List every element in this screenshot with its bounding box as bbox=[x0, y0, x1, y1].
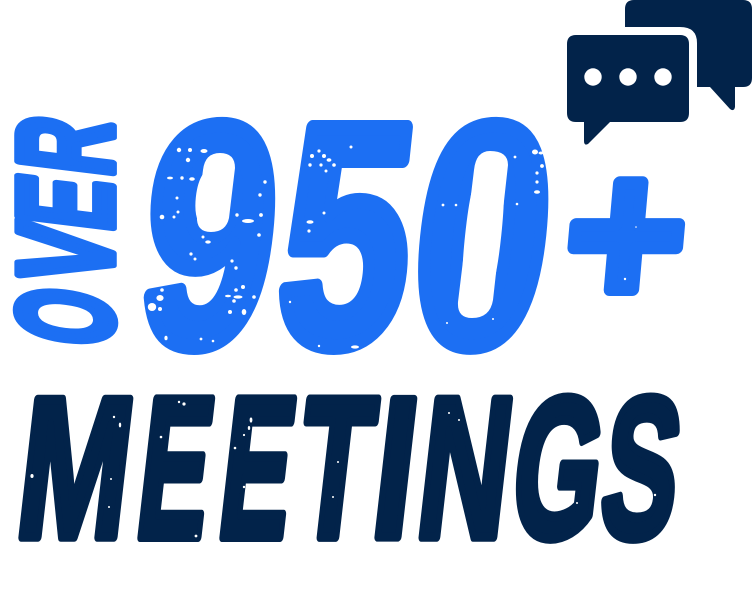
speckle texture on 950+ bbox=[148, 146, 637, 349]
headline: MEETINGS: S bbox=[592, 357, 692, 580]
speckle texture on MEETINGS bbox=[30, 401, 656, 537]
big number: 950 bbox=[127, 60, 569, 411]
big number: 950: 5 bbox=[265, 60, 430, 411]
three dots bbox=[584, 68, 672, 86]
headline: MEETINGS: T bbox=[287, 356, 385, 579]
headline: MEETINGS bbox=[8, 356, 692, 581]
headline: MEETINGS: I bbox=[363, 356, 428, 579]
headline: MEETINGS: E bbox=[210, 358, 305, 581]
headline: MEETINGS: N bbox=[408, 358, 523, 580]
plus sign: + bbox=[556, 117, 696, 351]
icon: chat bubbles bbox=[567, 0, 752, 145]
headline: MEETINGS: E bbox=[128, 358, 223, 581]
big number: 950: 0 bbox=[398, 61, 569, 411]
big number: 950: 9 bbox=[127, 60, 294, 411]
rotated label: OVER bbox=[0, 109, 142, 353]
headline: MEETINGS: G bbox=[503, 357, 615, 580]
back speech bubble bbox=[625, 0, 752, 110]
front speech bubble bbox=[567, 35, 689, 145]
headline: MEETINGS: M bbox=[8, 358, 144, 580]
